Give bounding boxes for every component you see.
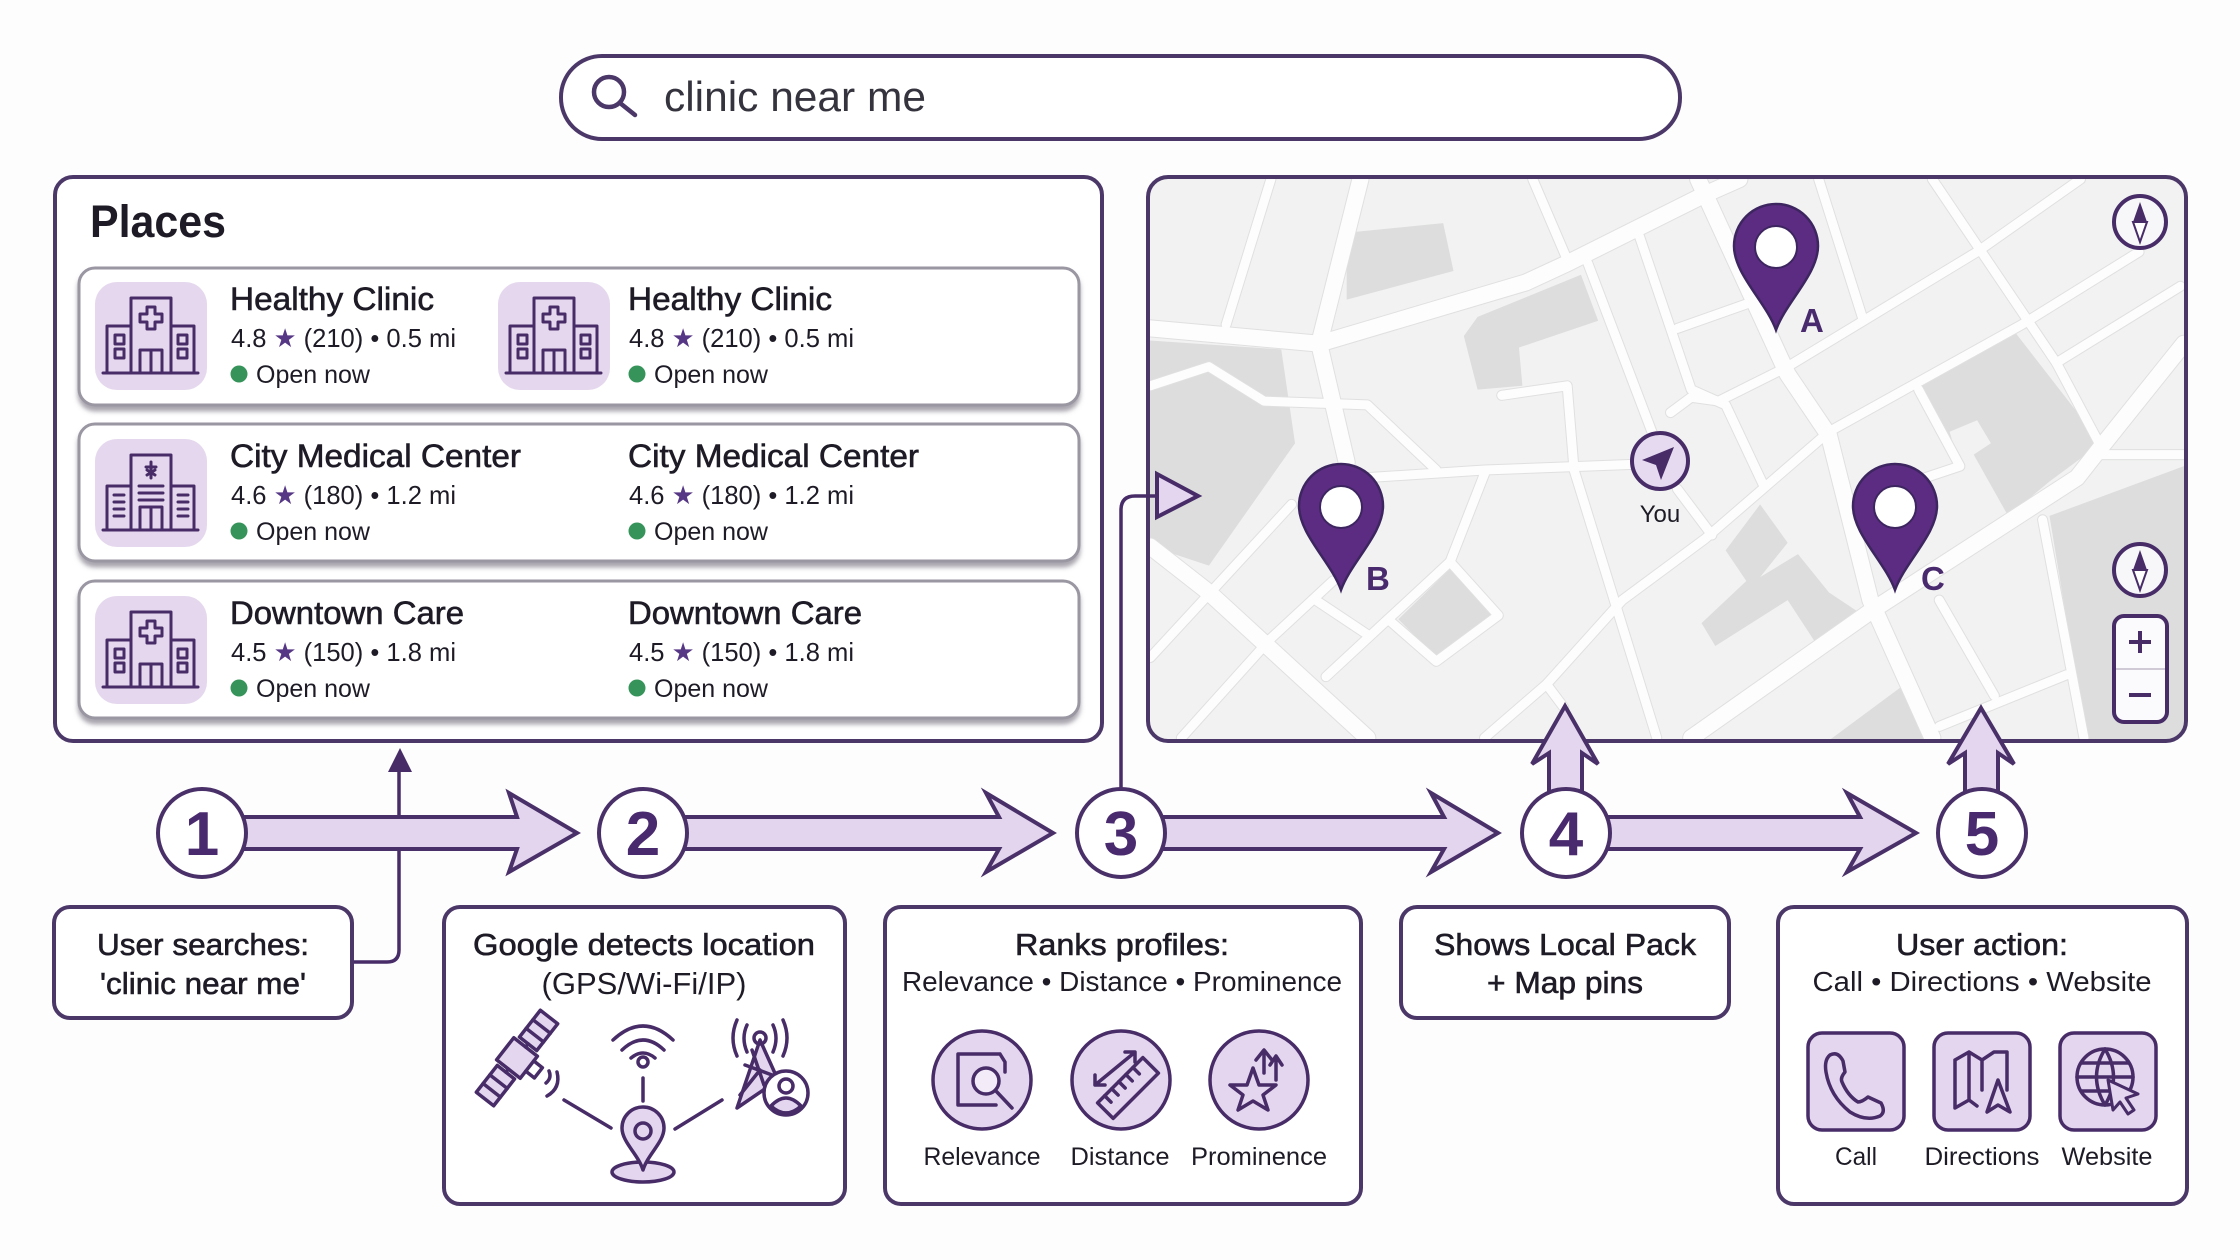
arrow: step 3 to 4 xyxy=(1161,793,1498,872)
label: call: Call xyxy=(1835,1143,1877,1171)
icon: medical center xyxy=(95,439,207,547)
listing right: 4.5 ★ (150) • 1.8 mi xyxy=(629,637,854,667)
arrow: step 4 up to map xyxy=(1532,706,1598,795)
listing left: Open now xyxy=(256,518,371,546)
pin A xyxy=(1734,204,1824,339)
panel: map xyxy=(1140,177,2194,746)
box: google detects location: (GPS/Wi-Fi/IP) xyxy=(542,966,746,1001)
arrow: step 1 to 2 xyxy=(240,793,577,872)
listing right: Healthy Clinic xyxy=(628,281,832,317)
step 2: 2 xyxy=(626,800,660,869)
heading: places: Places xyxy=(90,196,226,247)
listing right: Open now xyxy=(654,675,769,703)
box: google detects location xyxy=(444,907,845,1204)
connector: step 1 to places xyxy=(354,748,412,962)
box: shows local pack xyxy=(1401,907,1729,1018)
icon: cell tower and user xyxy=(733,1020,808,1115)
listing left xyxy=(230,438,521,546)
step 3 xyxy=(1077,789,1165,877)
icon: magnifier xyxy=(594,77,635,115)
listing right: Open now xyxy=(654,361,769,389)
step 2 xyxy=(599,789,687,877)
icon: location pin xyxy=(612,1107,674,1182)
listing left xyxy=(230,281,456,389)
listing right xyxy=(628,595,862,703)
listing left: 4.6 ★ (180) • 1.2 mi xyxy=(231,480,456,510)
step 5: 5 xyxy=(1965,800,1999,869)
listing right xyxy=(628,281,854,389)
box: user searches: User searches: xyxy=(97,927,309,962)
box: ranks profiles: Ranks profiles: xyxy=(1015,927,1229,962)
step 1 xyxy=(158,789,246,877)
connector lines xyxy=(564,1078,722,1129)
search query: clinic near me xyxy=(664,73,926,120)
pin A: A xyxy=(1800,302,1824,339)
listing left: Downtown Care xyxy=(230,595,464,631)
box: user action xyxy=(1778,907,2187,1204)
listing left: 4.8 ★ (210) • 0.5 mi xyxy=(231,323,456,353)
arrow: step 4 to 5 xyxy=(1605,793,1916,872)
icon: wifi xyxy=(613,1026,673,1067)
arrow: step 3 to map xyxy=(1121,474,1198,790)
icon: hospital xyxy=(95,282,207,390)
arrow: step 5 up to map xyxy=(1948,708,2014,795)
box: google detects location: Google detects location xyxy=(473,927,815,962)
pin B: B xyxy=(1366,560,1390,597)
search bar xyxy=(561,56,1680,139)
listing right: City Medical Center xyxy=(628,438,919,474)
box: ranks profiles: Relevance • Distance • Prominence xyxy=(902,966,1342,997)
row: City Medical Center xyxy=(79,424,1079,561)
zoom control xyxy=(2114,616,2167,722)
listing right: Open now xyxy=(654,518,769,546)
label: relevance: Relevance xyxy=(924,1143,1040,1171)
box: user searches xyxy=(54,907,352,1018)
listing left: Open now xyxy=(256,675,371,703)
pin C xyxy=(1853,464,1945,597)
step 4: 4 xyxy=(1549,800,1584,869)
icon: compass top xyxy=(2114,196,2166,248)
you marker: You xyxy=(1640,501,1680,528)
icon: clinic xyxy=(95,596,207,704)
step 4 xyxy=(1522,789,1610,877)
pin C: C xyxy=(1921,560,1945,597)
step 3: 3 xyxy=(1104,800,1138,869)
you marker xyxy=(1632,433,1688,528)
listing right: 4.6 ★ (180) • 1.2 mi xyxy=(629,480,854,510)
step 5 xyxy=(1938,789,2026,877)
icon: distance ruler xyxy=(1072,1031,1170,1129)
label: prominence: Prominence xyxy=(1191,1143,1327,1171)
icon: satellite xyxy=(473,1008,570,1115)
listing left: Healthy Clinic xyxy=(230,281,434,317)
icon: directions map xyxy=(1934,1033,2030,1130)
listing right xyxy=(628,438,919,546)
listing left: 4.5 ★ (150) • 1.8 mi xyxy=(231,637,456,667)
box: shows local pack: + Map pins xyxy=(1487,965,1643,1000)
box: ranks profiles xyxy=(885,907,1361,1204)
pin B xyxy=(1299,464,1390,597)
listing left: Open now xyxy=(256,361,371,389)
box: shows local pack: Shows Local Pack xyxy=(1434,927,1697,962)
row: Downtown Care xyxy=(79,581,1079,718)
row: Healthy Clinic xyxy=(79,268,1079,405)
label: website: Website xyxy=(2062,1143,2152,1171)
label: directions: Directions xyxy=(1924,1143,2040,1171)
box: user action: User action: xyxy=(1896,927,2068,962)
arrow: step 2 to 3 xyxy=(684,793,1053,872)
box: user searches: 'clinic near me' xyxy=(100,966,306,1001)
box: user action: Call • Directions • Website xyxy=(1812,966,2152,997)
icon: relevance xyxy=(933,1031,1031,1129)
icon: hospital xyxy=(498,282,610,390)
icon: website globe xyxy=(2060,1033,2156,1130)
label: distance: Distance xyxy=(1070,1143,1170,1171)
listing left xyxy=(230,595,464,703)
listing right: 4.8 ★ (210) • 0.5 mi xyxy=(629,323,854,353)
listing left: City Medical Center xyxy=(230,438,521,474)
panel: places xyxy=(55,177,1102,741)
listing right: Downtown Care xyxy=(628,595,862,631)
step 1: 1 xyxy=(185,800,219,869)
icon: call xyxy=(1808,1033,1904,1130)
icon: compass lower xyxy=(2114,544,2166,596)
icon: prominence xyxy=(1210,1031,1308,1129)
